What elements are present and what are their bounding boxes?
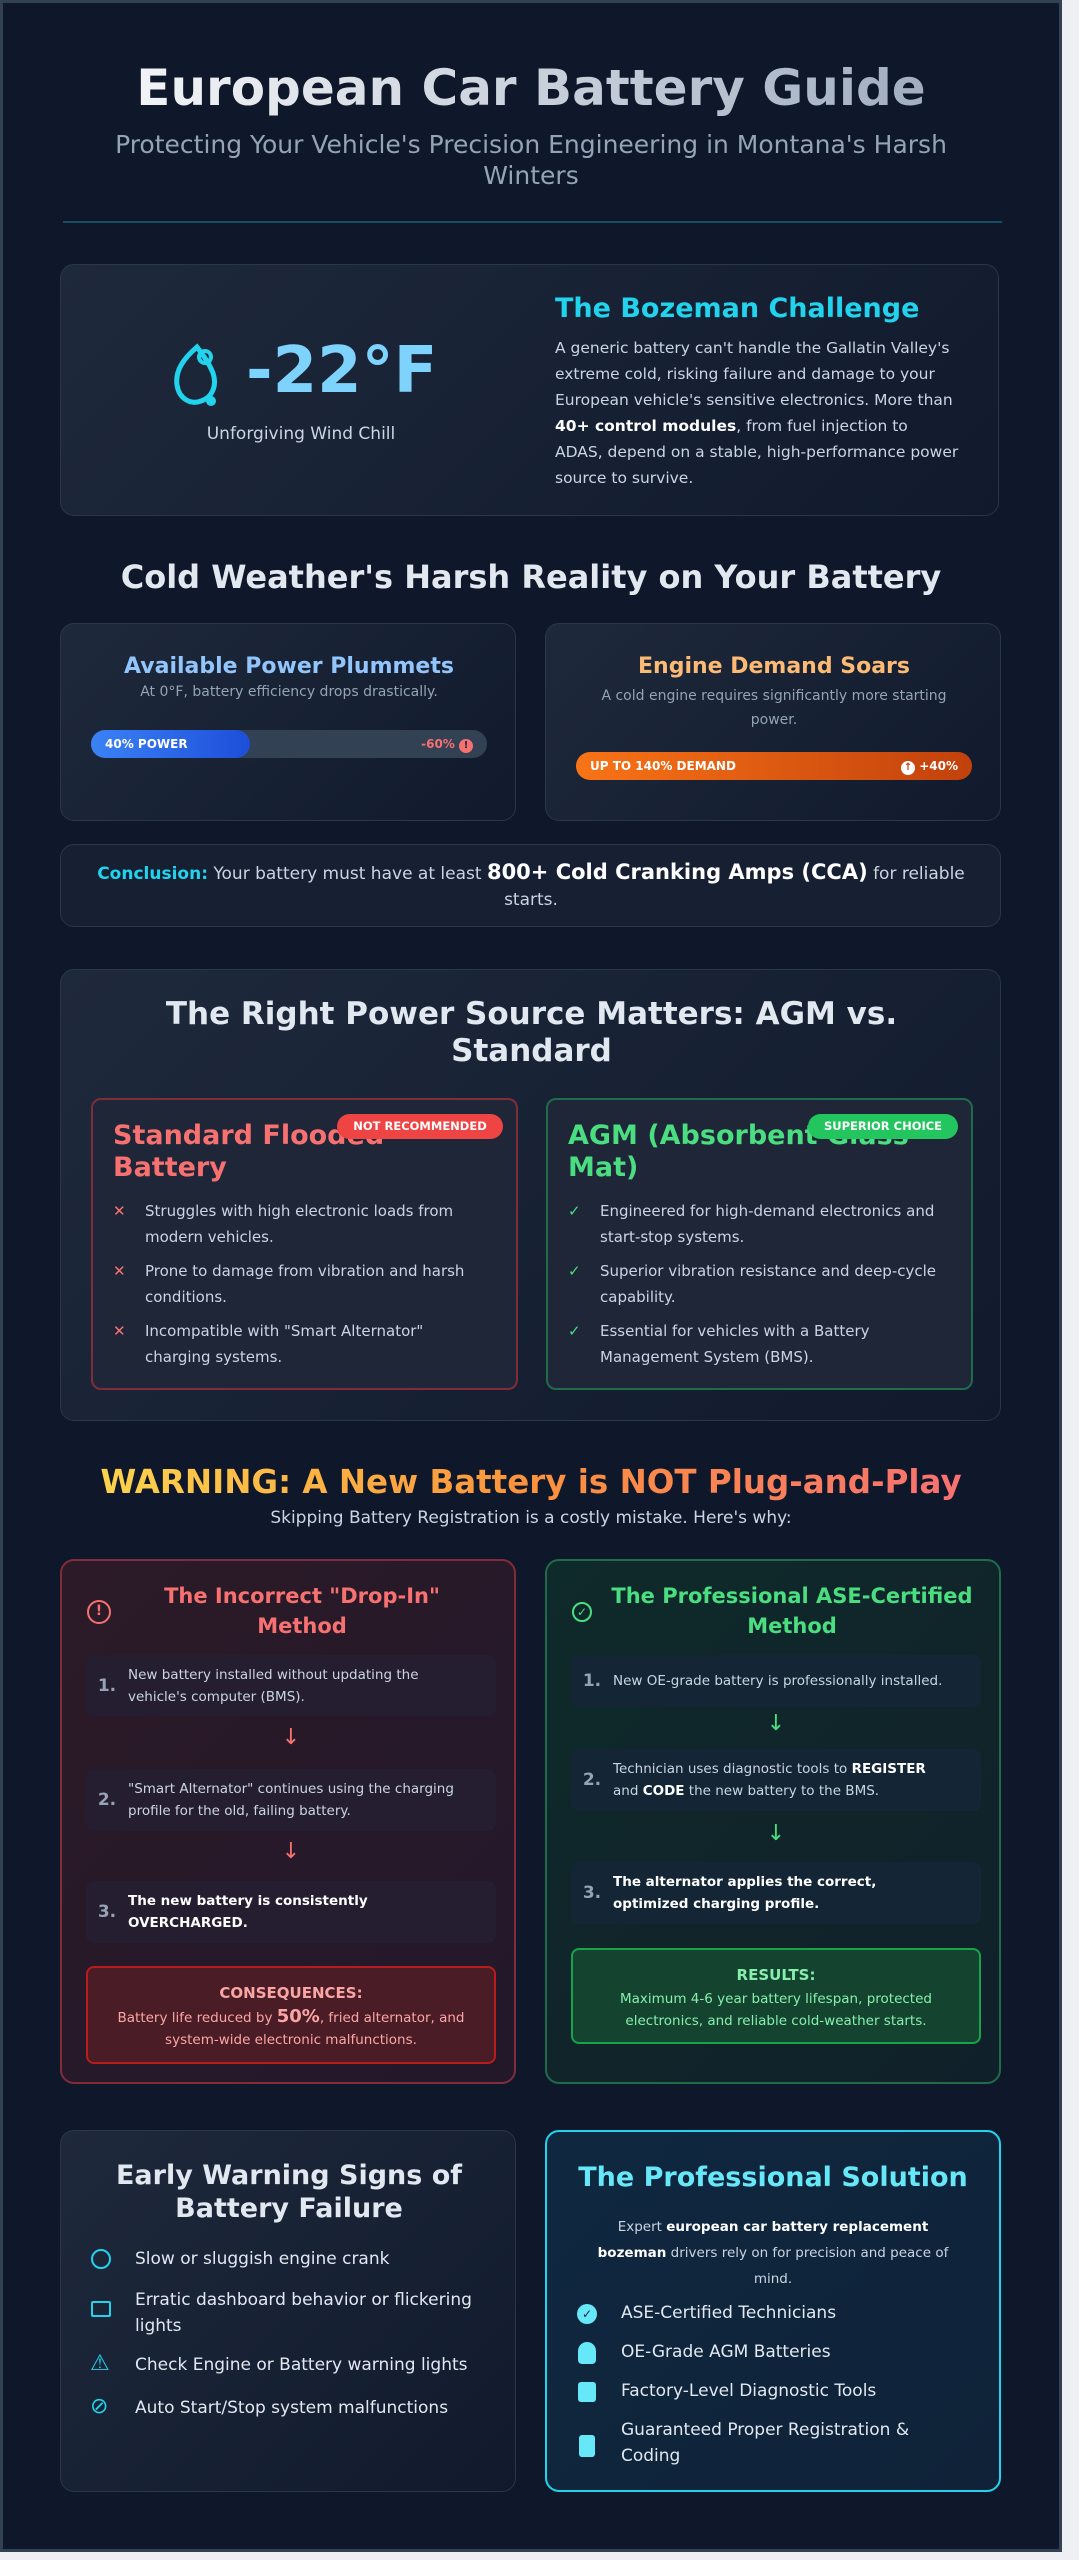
text: Expert european car battery replacement bozeman drivers rely on for precision and peace of mind. [598, 2219, 948, 2287]
heading: The Professional Solution [578, 2162, 968, 2193]
text: A cold engine requires significantly more starting power. [601, 688, 947, 728]
callout: results [571, 1948, 981, 2044]
badge [337, 1114, 503, 1139]
step 1: 1. [583, 1671, 601, 1691]
section heading: cold weather: Cold Weather's Harsh Reality on Your Battery [121, 558, 941, 596]
step 3: The alternator applies the correct, optimized charging profile. [613, 1874, 876, 1912]
item: prohibited: ⊘ [90, 2394, 108, 2419]
sub-panel: standard flooded: Incompatible with "Smart Alternator" charging systems. [145, 1322, 423, 1366]
arrow: ↓ [767, 1711, 785, 1736]
arrow: ↓ [282, 1725, 300, 1750]
callout: results: RESULTS: [737, 1966, 815, 1984]
heading: Early Warning Signs of Battery Failure [116, 2160, 462, 2224]
caption: Unforgiving Wind Chill [207, 424, 395, 444]
sub-panel: AGM [546, 1098, 973, 1390]
list: ✓ [568, 1202, 581, 1220]
sub-panel: standard flooded [91, 1098, 518, 1390]
text block: extreme cold, risking failure and damage to your [555, 365, 935, 383]
heading: The Incorrect "Drop-In" Method [164, 1584, 440, 1638]
item: tools: Factory-Level Diagnostic Tools [621, 2381, 876, 2401]
step 2: 2. [583, 1770, 601, 1790]
text block: A generic battery can't handle the Gallatin Valley's [555, 339, 949, 357]
item: clock: Slow or sluggish engine crank [135, 2249, 389, 2269]
panel: professional method [545, 1559, 1001, 2084]
bar chart: demand [576, 752, 972, 780]
step 2: 2. [98, 1790, 116, 1810]
sub-panel: AGM: ✓ [568, 1322, 581, 1340]
list: Engineered for high-demand electronics and start-stop systems. [600, 1202, 934, 1246]
step 1: New OE-grade battery is professionally installed. [613, 1673, 942, 1689]
panel: Bozeman challenge [60, 264, 999, 516]
bar chart: power: -60% [421, 737, 455, 751]
sub-panel: standard flooded: ✕ [113, 1262, 126, 1280]
panel: early warning signs [60, 2130, 516, 2492]
callout: consequences: Battery life reduced by 50%, fried alternator, and system-wide electronic malfunctions. [118, 2006, 464, 2048]
sub-panel: AGM: Essential for vehicles with a Battery Management System (BMS). [600, 1322, 870, 1366]
title: European Car Battery Guide [136, 59, 926, 117]
item: certified: ✓ [582, 2307, 592, 2321]
step 3 [86, 1881, 496, 1943]
text block: 40+ control modules, from fuel injection to [555, 417, 908, 435]
bar chart: demand: UP TO 140% DEMAND [590, 759, 736, 773]
warning subtitle: Skipping Battery Registration is a costly mistake. Here's why: [270, 1508, 792, 1528]
item: battery: OE-Grade AGM Batteries [621, 2342, 831, 2362]
panel: professional solution [545, 2130, 1001, 2492]
badge: NOT RECOMMENDED [353, 1119, 487, 1133]
callout: consequences [86, 1966, 496, 2064]
icon: check circle [572, 1602, 592, 1622]
sub-panel: AGM: ✓ [568, 1262, 581, 1280]
bar chart: power: 40% POWER [105, 737, 188, 751]
panel: power plummets [60, 623, 516, 821]
item: warning triangle: Check Engine or Battery warning lights [135, 2355, 468, 2375]
item: monitor: Erratic dashboard behavior or flickering lights [135, 2290, 472, 2336]
panel: engine demand [545, 623, 1001, 821]
sub-panel: AGM: Superior vibration resistance and deep-cycle capability. [600, 1262, 936, 1306]
panel: incorrect method [60, 1559, 516, 2084]
heading: The Professional ASE-Certified Method [611, 1584, 973, 1638]
step 2: "Smart Alternator" continues using the charging profile for the old, failing battery. [128, 1781, 454, 1819]
step 1: 1. [98, 1676, 116, 1696]
bar chart: demand: +40% [919, 759, 958, 773]
text block: source to survive. [555, 469, 693, 487]
item: prohibited: Auto Start/Stop system malfunctions [135, 2398, 448, 2418]
step 2 [571, 1749, 981, 1811]
step 1: New battery installed without updating the vehicle's computer (BMS). [128, 1666, 419, 1704]
item: prohibited [90, 2394, 448, 2419]
sub-panel: standard flooded: ✕ [113, 1322, 126, 1340]
step 3 [571, 1862, 981, 1924]
item: certified: ASE-Certified Technicians [621, 2303, 836, 2323]
sub-panel: standard flooded: Prone to damage from vibration and harsh conditions. [145, 1262, 464, 1306]
icon: alert [87, 1600, 111, 1624]
arrow: ↓ [282, 1839, 300, 1864]
warning heading: WARNING: A New Battery is NOT Plug-and-Play [100, 1463, 962, 1501]
item: registration: Guaranteed Proper Registration & Coding [621, 2420, 909, 2466]
icon: check circle: ✓ [577, 1605, 587, 1619]
arrow: ↓ [767, 1821, 785, 1846]
panel: AGM vs standard [60, 969, 1001, 1421]
list: ✕ [113, 1202, 126, 1220]
bar chart: power: ! [464, 740, 468, 751]
callout: consequences: CONSEQUENCES: [219, 1984, 363, 2002]
subtitle: Protecting Your Vehicle's Precision Engineering in Montana's Harsh Winters [115, 130, 947, 190]
bar chart: power [91, 730, 487, 758]
heading: Available Power Plummets [124, 654, 454, 679]
title: Standard Flooded Battery [113, 1120, 384, 1183]
text block [555, 339, 958, 487]
callout: conclusion: Conclusion: Your battery must have at least 800+ Cold Cranking Amps (CCA) for reliable starts. [97, 860, 965, 910]
badge [808, 1114, 958, 1139]
callout: conclusion [60, 844, 1001, 927]
title: AGM (Absorbent Glass Mat) [568, 1120, 909, 1183]
text: At 0°F, battery efficiency drops drastically. [140, 684, 438, 700]
step 2: Technician uses diagnostic tools to REGISTER and CODE the new battery to the BMS. [613, 1761, 926, 1799]
heading: Engine Demand Soars [638, 654, 910, 679]
step 3: The new battery is consistently OVERCHARGED. [128, 1893, 368, 1931]
title [3, 53, 1059, 123]
step 2 [86, 1769, 496, 1831]
step 1 [86, 1655, 496, 1716]
heading: The Bozeman Challenge [555, 293, 919, 324]
heading: The Right Power Source Matters: AGM vs. Standard [166, 996, 897, 1069]
item: warning triangle: ⚠ [90, 2351, 110, 2376]
list: Struggles with high electronic loads from modern vehicles. [145, 1202, 453, 1246]
step 1 [571, 1655, 981, 1707]
big temperature: -22°F [246, 334, 437, 408]
bar chart: demand: ↑ [904, 762, 912, 773]
text block: ADAS, depend on a stable, high-performance power [555, 443, 958, 461]
text block: European vehicle's sensitive electronics. More than [555, 391, 953, 409]
step 3: 3. [98, 1902, 116, 1922]
icon: thermometer/cold [174, 343, 218, 406]
step 3: 3. [583, 1883, 601, 1903]
icon: alert: ! [96, 1603, 102, 1619]
badge: SUPERIOR CHOICE [824, 1119, 942, 1133]
callout: results: Maximum 4-6 year battery lifespan, protected electronics, and reliable cold-weather starts. [620, 1991, 932, 2029]
